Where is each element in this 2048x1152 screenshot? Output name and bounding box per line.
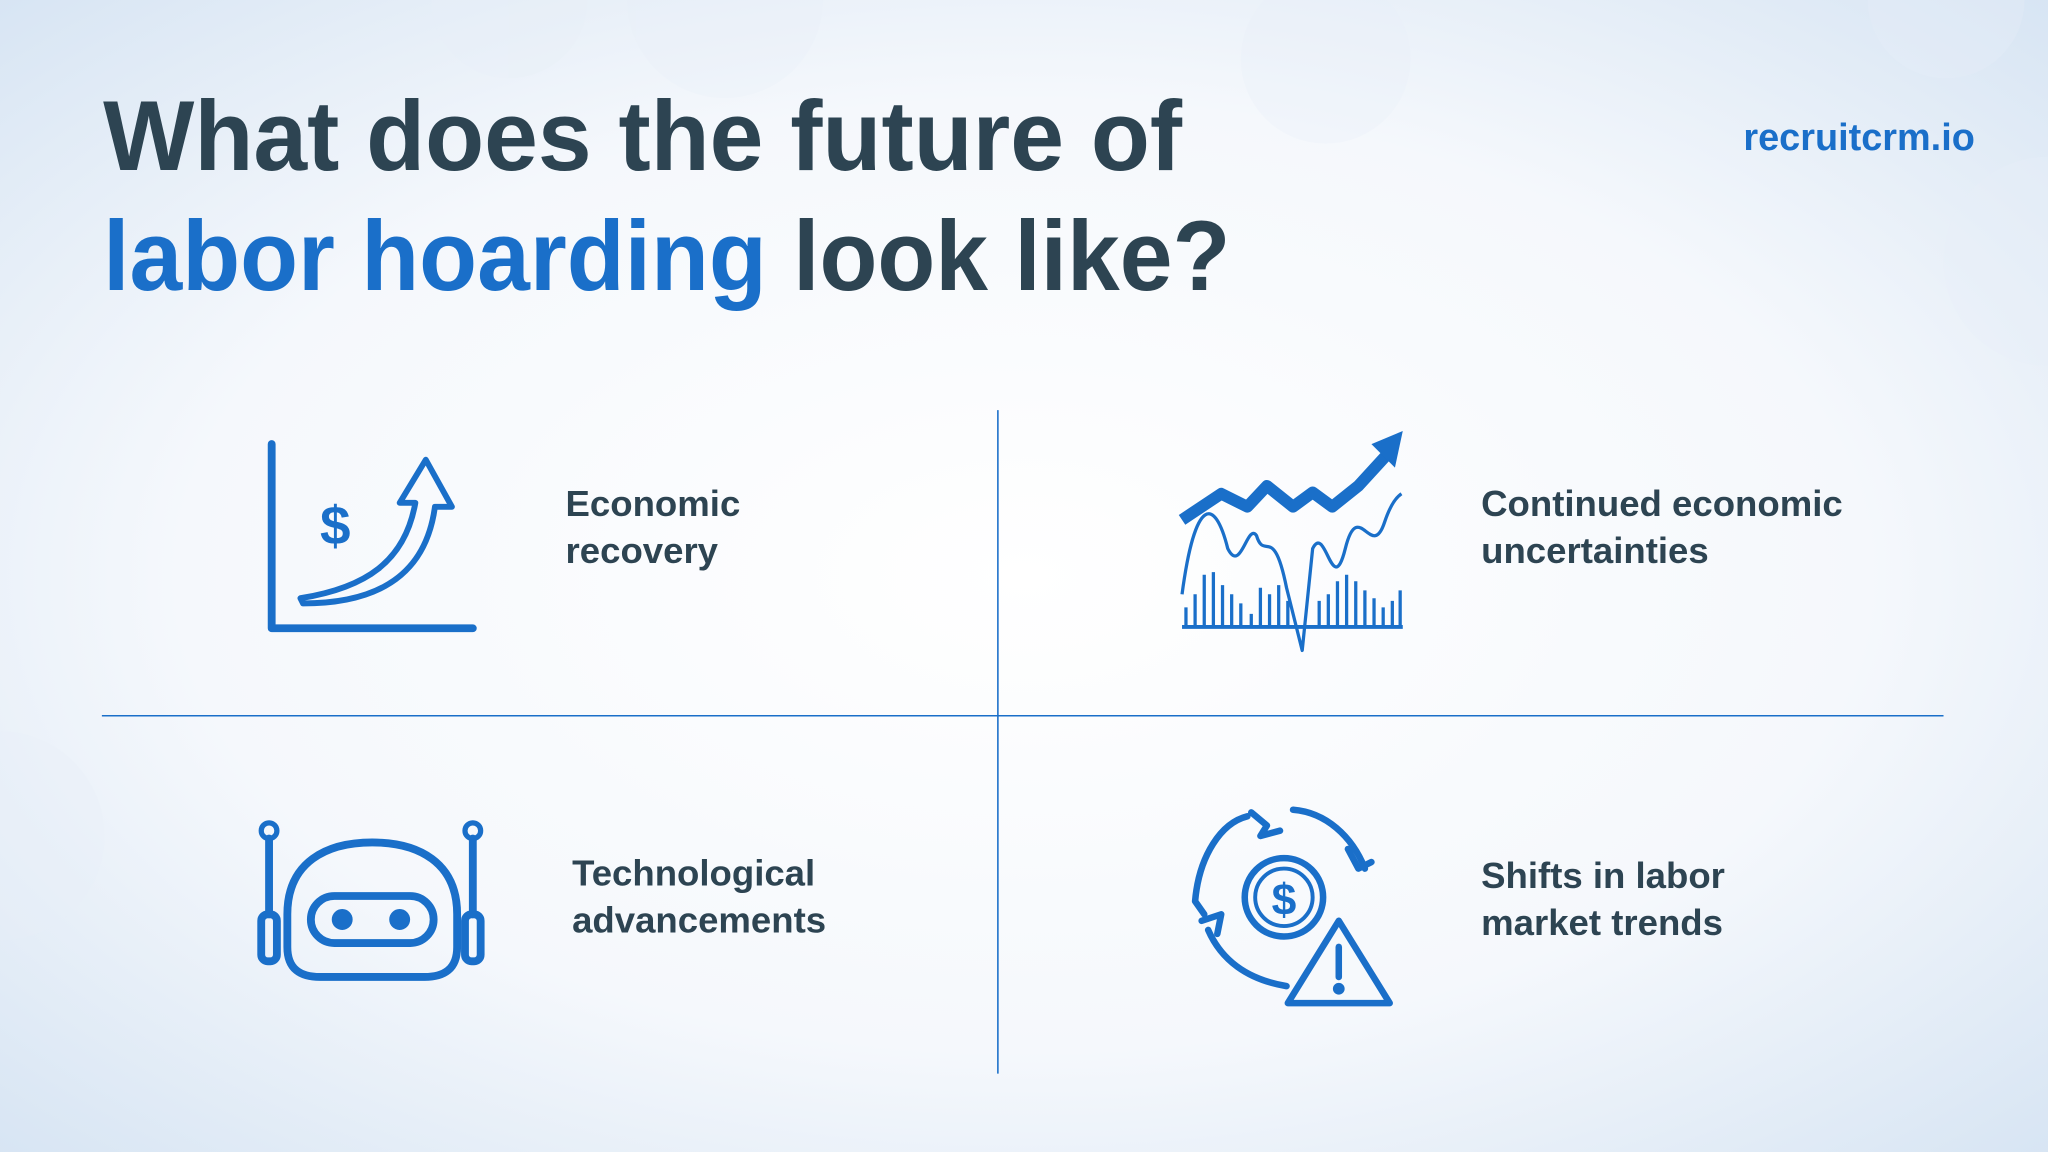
label: technological advancements (572, 853, 826, 941)
label: economic recovery (566, 483, 740, 571)
label: technological advancements: Technological (572, 853, 815, 894)
icon: growth chart: $ (320, 495, 351, 557)
dividers (102, 410, 1944, 1074)
label: economic recovery: Economic (566, 483, 740, 524)
icon: volatile stock (1182, 431, 1403, 650)
label: shifts in labor market trends (1481, 855, 1725, 943)
icon: growth chart (272, 444, 473, 628)
label: technological advancements: advancements (572, 900, 826, 941)
title (103, 81, 1230, 312)
label: continued economic uncertainties: Continued economic (1481, 483, 1843, 524)
title: labor hoarding look like? (103, 201, 1230, 312)
title: What does the future of (103, 81, 1183, 192)
label: continued economic uncertainties (1481, 483, 1843, 571)
label: shifts in labor market trends: Shifts in labor (1481, 855, 1725, 896)
icon: market shift: $ (1272, 875, 1297, 924)
icon: market shift (1195, 810, 1390, 1003)
label: economic recovery: recovery (566, 530, 719, 571)
label: continued economic uncertainties: uncertainties (1481, 530, 1709, 571)
brand: recruitcrm.io (1743, 117, 1975, 159)
icon: robot (261, 823, 481, 977)
label: shifts in labor market trends: market trends (1481, 902, 1723, 943)
